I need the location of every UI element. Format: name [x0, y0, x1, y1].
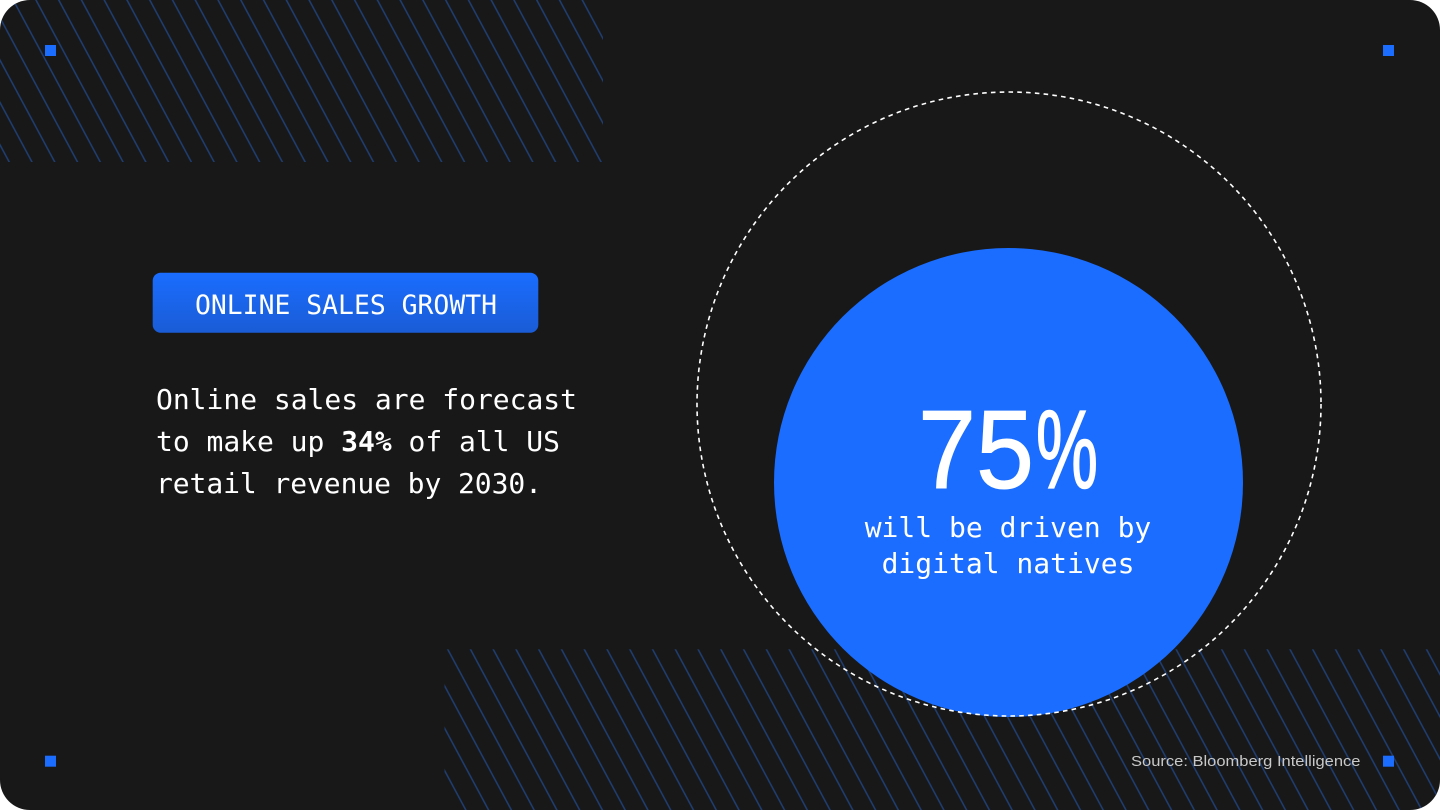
stat caption: will be driven by: [865, 511, 1151, 544]
corner marker: bottom left: [45, 756, 56, 767]
stat value: 75: [918, 388, 1034, 512]
dashed orbit ring: [697, 92, 1321, 716]
corner marker: top left: [45, 45, 56, 56]
heading badge: ONLINE SALES GROWTH: [195, 290, 497, 321]
body text: Online sales are forecast: [156, 383, 577, 416]
stat caption: [865, 511, 1151, 580]
corner marker: top right: [1383, 45, 1394, 56]
corner marker: bottom right: [1383, 756, 1394, 767]
body text: retail revenue by 2030.: [156, 467, 542, 500]
stat value: [918, 388, 1098, 512]
body text: [156, 383, 577, 500]
stat circle: [774, 248, 1243, 717]
source note: Source: Bloomberg Intelligence: [1131, 753, 1360, 770]
stat caption: digital natives: [882, 547, 1134, 580]
heading badge: [153, 273, 538, 333]
stat value: %: [1036, 388, 1098, 512]
body text: to make up 34% of all US: [156, 425, 560, 458]
